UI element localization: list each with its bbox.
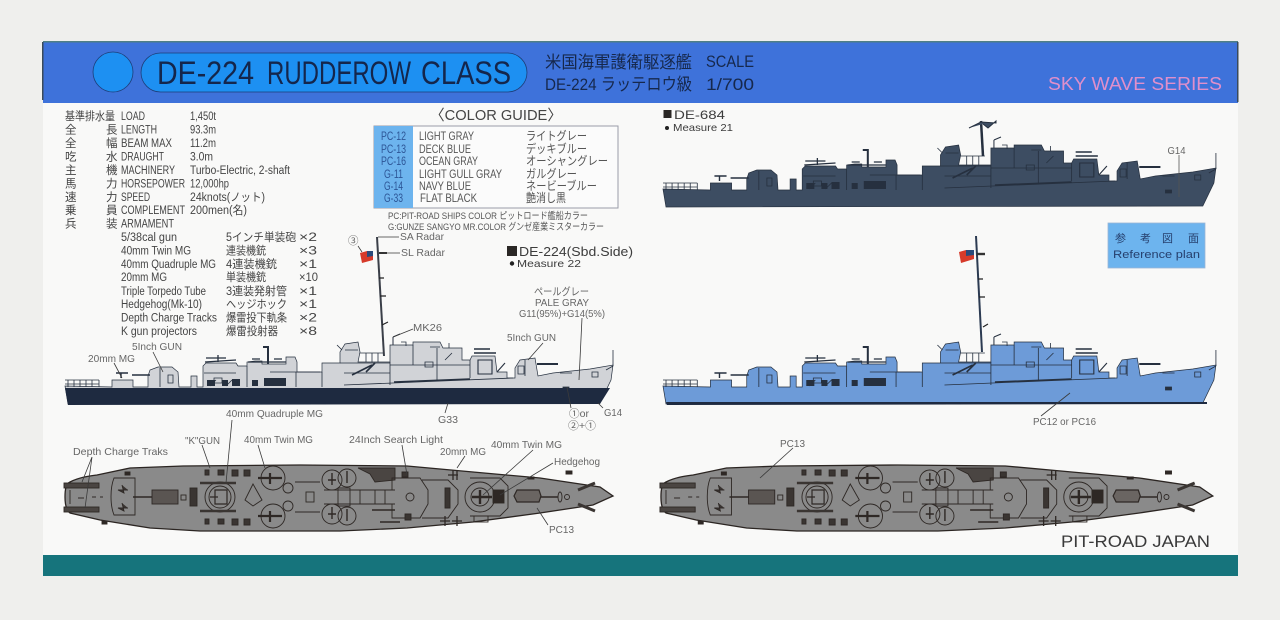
ship: DE-224 plan view <box>64 465 613 531</box>
label: DE-684 <box>664 108 1186 157</box>
color guide: オーシャングレー <box>526 154 608 168</box>
label: DE-684: G14 <box>1168 145 1186 157</box>
specification table: 20mm MG <box>121 272 167 284</box>
specification table: 200men(名) <box>190 203 247 217</box>
specification table: K gun projectors <box>121 326 197 338</box>
color guide: PC:PIT-ROAD SHIPS COLOR ピットロード艦船カラー <box>388 210 588 222</box>
label: PC13: PC13 <box>780 438 805 450</box>
specification table: 機 <box>106 164 118 177</box>
labels: DE-224 plan view: 20mm MG <box>440 446 486 458</box>
specification table: 11.2m <box>190 138 216 150</box>
labels: DE-224 side view: G14 <box>604 407 622 419</box>
specification table: ×8 <box>299 326 317 338</box>
subtitle text <box>545 52 754 94</box>
subtitle text: 米国海軍護衛駆逐艦 <box>545 53 692 72</box>
specification table: 全 <box>65 122 77 136</box>
labels: DE-224 plan view: 40mm Twin MG <box>491 439 562 451</box>
specification table: 単装機銃 <box>226 270 266 284</box>
labels: DE-224 side view: 5Inch GUN <box>132 341 182 353</box>
labels: DE-224 plan view: Hedgehog <box>554 456 600 468</box>
specification table: 全 <box>65 136 77 150</box>
label: DE-684: Measure 21 <box>673 122 733 134</box>
color guide: DECK BLUE <box>419 142 471 156</box>
specification table: 12,000hp <box>190 178 229 190</box>
specification table: 吃 <box>65 150 77 164</box>
ship: blue reference side view <box>663 236 1216 405</box>
labels: DE-224 side view: Measure 22 <box>517 258 581 270</box>
specification table: LOAD <box>121 111 145 123</box>
callout: reference plan: 参 <box>1115 232 1126 245</box>
color guide: 艶消し黒 <box>526 190 566 205</box>
specification table: 24knots(ノット) <box>190 192 265 204</box>
color guide: NAVY BLUE <box>419 179 471 193</box>
specification table: Turbo-Electric, 2-shaft <box>190 165 291 177</box>
specification table: 3.0m <box>190 152 213 164</box>
specification table: 93.3m <box>190 124 216 136</box>
labels: DE-224 side view <box>88 231 633 432</box>
color guide: FLAT BLACK <box>420 191 477 205</box>
color guide: PC-13 <box>381 142 406 156</box>
specification table: ×1 <box>299 286 317 298</box>
specification table: 装 <box>106 218 118 230</box>
labels: DE-224 side view: SL Radar <box>401 247 446 259</box>
color guide: LIGHT GRAY <box>419 129 474 143</box>
specification table: 爆雷投下軌条 <box>226 310 287 324</box>
labels: DE-224 side view: G11(95%)+G14(5%) <box>519 308 605 320</box>
specification table: 力 <box>106 178 118 190</box>
color guide: G:GUNZE SANGYO MR.COLOR グンゼ産業ミスターカラー <box>388 221 604 233</box>
labels: DE-224 plan view: 40mm Quadruple MG <box>226 408 323 420</box>
specification table: DRAUGHT <box>121 152 164 164</box>
labels: DE-224 plan view: 40mm Twin MG <box>244 434 313 446</box>
labels: DE-224 side view: DE-224(Sbd.Side) <box>519 244 633 259</box>
labels: DE-224 plan view: "K"GUN <box>185 435 220 447</box>
specification table: 5インチ単装砲 <box>226 230 296 244</box>
labels: DE-224 plan view: Depth Charge Traks <box>73 446 168 458</box>
specification table: 40mm Twin MG <box>121 246 191 258</box>
maker name: PIT-ROAD JAPAN <box>1061 532 1210 551</box>
specification table: ×1 <box>299 299 317 311</box>
specification table: ×2 <box>299 232 317 244</box>
ship: DE-684 Measure 21 <box>663 121 1216 207</box>
series label: SKY WAVE SERIES <box>1048 74 1222 94</box>
color guide: PC-16 <box>381 154 406 168</box>
specification table: ×1 <box>299 259 317 271</box>
specification table: SPEED <box>121 192 150 204</box>
specification table: Triple Torpedo Tube <box>121 286 206 298</box>
callout: reference plan <box>1108 223 1205 268</box>
specification table: 連装機銃 <box>226 244 266 258</box>
icon: blue circle <box>93 52 133 92</box>
title pill <box>141 53 527 92</box>
ship: DE-224 starboard side <box>65 237 613 405</box>
labels: DE-224 plan view: PC13 <box>549 524 574 536</box>
callout: reference plan: 図 <box>1162 232 1173 245</box>
specification table: ×3 <box>299 246 317 258</box>
labels: DE-224 plan view <box>73 408 600 536</box>
labels: DE-224 side view: ②+① <box>568 420 597 432</box>
specification table: 乗 <box>65 204 77 217</box>
color guide: LIGHT GULL GRAY <box>419 167 502 181</box>
specification table: 基準排水量 <box>65 109 115 123</box>
subtitle text: 1/700 <box>706 75 754 94</box>
specification table: 4連装機銃 <box>226 257 277 271</box>
specification table: ARMAMENT <box>121 218 174 230</box>
title pill: DE-224 <box>157 55 254 91</box>
label: DE-684: DE-684 <box>674 108 725 122</box>
color guide: OCEAN GRAY <box>419 154 478 168</box>
color guide: G-14 <box>384 179 403 193</box>
specification table: LENGTH <box>121 124 157 136</box>
labels: DE-224 side view: MK26 <box>413 322 442 334</box>
title pill: RUDDEROW <box>267 55 412 91</box>
specification table: 員 <box>106 204 118 217</box>
color guide: ネービーブルー <box>526 178 597 193</box>
specification table: HORSEPOWER <box>121 178 185 190</box>
specification table: 長 <box>106 124 118 136</box>
color guide: デッキブルー <box>526 141 587 156</box>
specification table: 兵 <box>65 218 76 230</box>
specification table: MACHINERY <box>121 165 175 177</box>
labels: DE-224 side view: ペールグレー <box>534 285 589 298</box>
labels: DE-224 plan view: 24Inch Search Light <box>349 434 443 446</box>
specification table: 40mm Quadruple MG <box>121 259 216 271</box>
specification table: Depth Charge Tracks <box>121 312 217 324</box>
specification table: 馬 <box>65 178 76 190</box>
specification table: 力 <box>106 191 118 204</box>
labels: DE-224 side view: 5Inch GUN <box>507 332 556 344</box>
subtitle text: DE-224 ラッテロウ級 <box>545 75 692 94</box>
specification table: COMPLEMENT <box>121 205 185 217</box>
labels: DE-224 side view: 20mm MG <box>88 353 135 365</box>
specification table: ヘッジホック <box>226 298 287 311</box>
labels: DE-224 side view: ③ <box>348 235 359 247</box>
specification table <box>65 109 318 338</box>
title pill: CLASS <box>421 55 511 91</box>
color guide: 〈COLOR GUIDE〉 <box>430 107 562 124</box>
specification table: 1,450t <box>190 111 217 123</box>
color guide: ガルグレー <box>526 167 577 181</box>
color guide: G-11 <box>384 167 403 181</box>
color guide: G-33 <box>384 191 403 205</box>
specification table: 5/38cal gun <box>121 232 177 244</box>
label: PC12 or PC16 <box>1033 393 1096 428</box>
specification table: 幅 <box>106 137 118 150</box>
teal bottom band <box>43 555 1238 576</box>
specification table: 水 <box>106 150 118 164</box>
labels: DE-224 side view: ①or <box>569 408 589 420</box>
color guide <box>374 107 618 233</box>
specification table: ×10 <box>299 272 318 284</box>
blue header band <box>42 41 1238 103</box>
callout: reference plan: 面 <box>1188 233 1199 245</box>
color guide: ライトグレー <box>526 129 587 143</box>
specification table: ×2 <box>299 312 317 324</box>
label: PC13 <box>760 438 805 478</box>
subtitle text: SCALE <box>706 52 754 71</box>
ship: reference plan view <box>660 465 1213 531</box>
callout: reference plan: 考 <box>1140 232 1151 245</box>
color guide: PC-12 <box>381 129 406 143</box>
specification table: Hedgehog(Mk-10) <box>121 299 202 311</box>
specification table: 速 <box>65 191 77 204</box>
labels: DE-224 side view: SA Radar <box>400 231 444 243</box>
callout: reference plan: Reference plan <box>1113 249 1200 261</box>
specification table: 3連装発射管 <box>226 284 287 298</box>
label: PC12 or PC16: PC12 or PC16 <box>1033 416 1096 428</box>
specification table: 爆雷投射器 <box>226 324 278 338</box>
labels: DE-224 side view: G33 <box>438 414 458 426</box>
icon: flag <box>360 251 373 263</box>
specification table: BEAM MAX <box>121 138 172 150</box>
specification table: 主 <box>65 164 76 177</box>
icon: flag <box>959 250 974 263</box>
labels: DE-224 side view: PALE GRAY <box>535 297 589 309</box>
